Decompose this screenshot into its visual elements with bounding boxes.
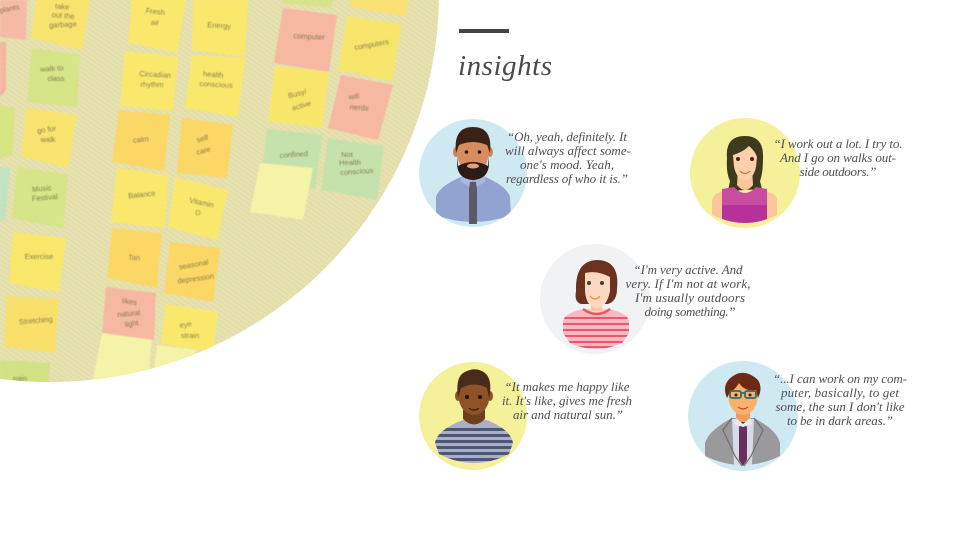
sticky note: fresh air: Fresh (145, 6, 165, 17)
quote 1 (505, 129, 631, 186)
quote 2: And I go on walks out- (779, 150, 896, 165)
sticky note: energy (192, 0, 248, 57)
photo: sticky notes on fabric wall in a large circle (0, 0, 440, 385)
sticky note: seasonal depression: seasonal (178, 257, 209, 272)
sticky note: pale quote note (250, 163, 313, 220)
sticky note: stretching: Stretching (19, 315, 53, 326)
quote 2: “I work out a lot. I try to. (774, 136, 902, 151)
sticky note: energy: Energy (207, 20, 232, 31)
sticky note: computer (274, 8, 337, 72)
quote 1: will always affect some- (505, 143, 631, 158)
sticky note: self care (177, 118, 233, 178)
sticky note: circadian rhythm: Circadian (139, 69, 171, 80)
sticky note: vitamin D: D (195, 208, 201, 217)
sticky note: pale handwritten note (93, 333, 152, 380)
sticky note: tan: Tan (128, 253, 140, 262)
sticky note: take out the garbage: take (55, 1, 70, 12)
quote 4: “It makes me happy like (504, 379, 630, 394)
sticky note: teal edge (0, 167, 10, 221)
sticky note: wifi nerds (328, 75, 393, 140)
sticky note: computers: computers (354, 37, 390, 52)
sticky note: stretching (4, 296, 59, 353)
quote 5: puter, basically, to get (780, 385, 899, 400)
sticky note: go for walk: walk (39, 135, 56, 144)
sticky note: confined (263, 129, 322, 190)
sticky note: music festival: Festival (32, 192, 58, 203)
quote 3: very. If I'm not at work, (626, 276, 750, 291)
quote 5: “...I can work on my com- (773, 371, 907, 386)
sticky note: computer: computer (293, 31, 325, 42)
sticky note: top green (283, 0, 333, 8)
avatar: woman with striped shirt (540, 244, 650, 354)
sticky note: seasonal depression (164, 242, 220, 302)
sticky note: top yellow (350, 0, 408, 16)
title: insights (458, 50, 552, 82)
quote 4 (502, 379, 632, 422)
sticky note: take out the garbage: garbage (49, 19, 77, 30)
quote 4: it. It's like, gives me fresh (502, 393, 632, 408)
quote 3: doing something.” (644, 304, 736, 319)
sticky note: busy active (268, 66, 329, 128)
sticky note: seasonal depression: depression (177, 272, 214, 286)
sticky note: walk to class: walk to (39, 63, 64, 74)
sticky note: likes natural light (102, 287, 156, 340)
quote 5: to be in dark areas.” (787, 413, 893, 428)
sticky note: go for walk: go for (37, 124, 57, 135)
sticky note: busy active: active (291, 99, 312, 112)
sticky note: balance (111, 168, 168, 228)
sticky note: health conscious: health (203, 69, 224, 80)
sticky note: confined: confined (279, 149, 308, 160)
sticky note: calm (112, 110, 170, 171)
sticky note: not health conscious (321, 138, 384, 200)
sticky note: plants (0, 0, 27, 40)
quote 3: I'm usually outdoors (634, 290, 745, 305)
sticky note: fresh air: air (151, 18, 160, 27)
quote 3: “I'm very active. And (634, 262, 743, 277)
sticky note: gain: gain (13, 374, 27, 383)
quote 2 (774, 136, 902, 179)
sticky note: eye strain (161, 304, 218, 352)
sticky note: likes natural light: natural (117, 308, 141, 319)
quote 5: some, the sun I don't like (776, 399, 905, 414)
sticky note: wifi nerds: nerds (350, 102, 369, 113)
avatar: man with beard and tie (419, 119, 527, 227)
sticky note: tan (107, 228, 162, 288)
sticky note: not health conscious: Health (339, 158, 361, 167)
quote 4: air and natural sun.” (513, 407, 623, 422)
sticky note: self care: care (195, 144, 212, 157)
sticky note: calm: calm (132, 134, 149, 145)
sticky note: circadian rhythm (120, 51, 178, 111)
sticky note: busy active: Busy/ (287, 87, 308, 100)
sticky note: vitamin D (168, 177, 228, 240)
avatar: man with glasses and suit (688, 361, 798, 471)
sticky note: exercise: Exercise (25, 252, 53, 261)
sticky note: vitamin D: Vitamin (188, 196, 215, 210)
quote 2: side outdoors.” (800, 164, 876, 179)
quote 1: one's mood. Yeah, (520, 157, 614, 172)
sticky note: likes natural light: likes (121, 296, 138, 307)
sticky note: balance: Balance (128, 189, 156, 200)
heading rule (459, 29, 509, 33)
sticky note: not health conscious: Not (341, 150, 354, 159)
sticky note: exercise (9, 232, 66, 292)
sticky note: computers (338, 16, 402, 81)
sticky note: self care: self (196, 132, 210, 144)
avatar: woman with long dark hair (690, 118, 800, 229)
sticky note: health conscious (185, 55, 245, 117)
sticky note: eye strain: strain (181, 331, 199, 340)
sticky note: walk to class (27, 48, 80, 107)
sticky note: pale lower note (154, 345, 197, 369)
quote 1: regardless of who it is.” (506, 171, 628, 186)
sticky note: gain (0, 360, 50, 385)
sticky note: eye strain: eye (179, 319, 192, 330)
quote 3 (626, 262, 750, 319)
sticky note: go for walk (21, 108, 77, 168)
sticky note: circadian rhythm: rhythm (141, 80, 163, 89)
sticky note: walk to class: class (47, 74, 65, 83)
sticky note: take out the garbage: out the (51, 10, 75, 21)
sticky note: music festival (12, 167, 68, 228)
sticky note: wifi nerds: wifi (347, 92, 360, 101)
sticky note: not health conscious: conscious (340, 166, 374, 177)
avatar: man with striped sweater (419, 362, 527, 470)
sticky note: health conscious: conscious (199, 79, 233, 90)
sticky note: likes natural light: light (124, 318, 140, 329)
quote 5 (773, 371, 907, 428)
sticky note: music festival: Music (32, 183, 52, 194)
quote 1: “Oh, yeah, definitely. It (507, 129, 627, 144)
sticky note: green edge (0, 105, 15, 158)
sticky note: fresh air (128, 0, 186, 53)
sticky note: take out the garbage (31, 0, 90, 50)
sticky note: pink edge (0, 42, 6, 97)
